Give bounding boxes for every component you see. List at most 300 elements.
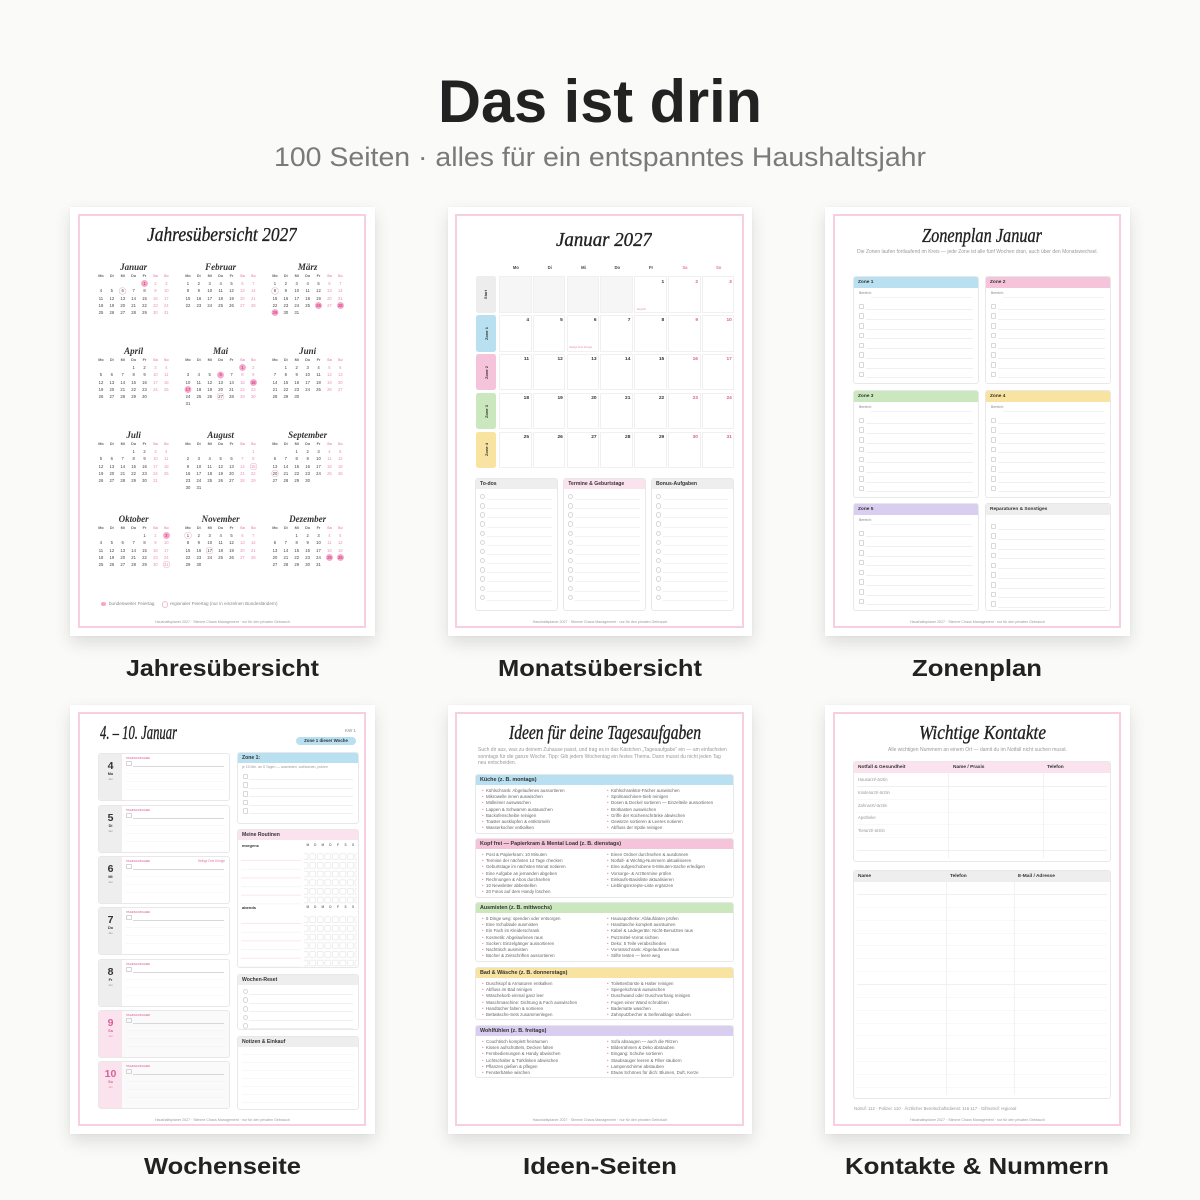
calendar: Juli: Mo: [98, 442, 104, 446]
panel: Zone 1 tasks: Zone 1:: [242, 755, 260, 761]
calendar: Mai: 23: [251, 387, 256, 392]
calendar: August: 17: [196, 471, 201, 476]
calendar: November: 16: [196, 548, 201, 553]
idea card: Bad & Wäsche: Bad & Wäsche (z. B. donnerstags): [480, 970, 567, 976]
month grid: 26: [557, 435, 563, 440]
list: Wohlfühlen right: Lampenschirme abstauben: [611, 1064, 664, 1069]
calendar: September: 11: [327, 456, 332, 461]
caption: Ideen-Seiten: Ideen-Seiten: [523, 1153, 677, 1179]
list: Wohlfühlen right: Sofa absaugen — auch die Ritzen: [611, 1039, 678, 1044]
list: Wohlfühlen left: [482, 1039, 560, 1075]
calendar: März: Mo: [272, 274, 278, 278]
calendar: März: 27: [327, 303, 332, 308]
calendar: Dezember: 9: [306, 540, 309, 545]
calendar: Mai: 14: [229, 380, 234, 385]
weekday headers: Mi: [581, 265, 586, 270]
calendar: Oktober: 10: [164, 540, 169, 545]
calendar: November: Do: [218, 526, 223, 530]
calendar: Juni: 15: [284, 380, 288, 385]
calendar: Mai: 16: [251, 380, 256, 385]
calendar: Dezember: 13: [273, 548, 277, 553]
idea card: Kopf frei: Kopf frei — Papierkram & Mental Load (z. B. dienstags): [480, 841, 621, 847]
panel: Wochen-Reset: [237, 974, 359, 1030]
calendar: September: 18: [327, 464, 332, 469]
calendar: März: 14: [338, 288, 343, 293]
weekday letters: morgens: D: [329, 843, 332, 847]
panel: Monatsübersicht page: [448, 207, 752, 636]
calendar: Mai: 29: [240, 394, 245, 399]
calendar: Juli: 27: [110, 478, 114, 483]
calendar: Dezember: 6: [274, 540, 276, 545]
calendar: März: 16: [284, 296, 288, 301]
list: Küche right: Dosen & Deckel sortieren — Einzelteile aussortieren: [611, 800, 713, 805]
calendar: Februar: 18: [218, 296, 223, 301]
calendar: Juli: 8: [132, 456, 135, 461]
calendar: September: 25: [327, 471, 332, 476]
calendar: Oktober: 16: [153, 548, 158, 553]
calendar: Juni: 19: [327, 380, 332, 385]
calendar: November: 1: [187, 533, 189, 538]
idea card: Kopf frei: [475, 838, 734, 898]
calendar: September: Mo: [272, 442, 278, 446]
table: Kontakte: Name: [858, 874, 871, 879]
table: Notfall & Gesundheit: Tierarzt/-ärztin: [858, 828, 885, 833]
calendar: August: 24: [196, 478, 201, 483]
calendar: September: 15: [294, 464, 299, 469]
subtitle: 100 Seiten · alles für ein entspanntes Haushaltsjahr: [274, 142, 926, 172]
list: Bonus-Aufgaben: Bonus-Aufgaben: [656, 481, 697, 487]
calendar: Juni: 1: [285, 365, 287, 370]
calendar: September: 23: [305, 471, 310, 476]
zone card: Zone 5: Bereich:: [859, 518, 872, 522]
day card: Freitag: Fr: [109, 978, 112, 982]
calendar: September: 1: [296, 449, 298, 454]
calendar: Dezember: 14: [284, 548, 288, 553]
calendar: Dezember: 22: [294, 555, 299, 560]
calendar: Juni: Juni: [299, 346, 316, 356]
calendar: Oktober: 15: [142, 548, 147, 553]
day card: Freitag: [98, 959, 230, 1007]
calendar: Februar: 4: [219, 281, 222, 286]
calendar: Januar: Januar: [120, 262, 147, 272]
day card: Sonntag: So: [108, 1080, 113, 1084]
calendar: Juli: 10: [153, 456, 158, 461]
calendar: Februar: 26: [229, 303, 234, 308]
calendar: November: Fr: [230, 526, 233, 530]
calendar: Juni: 3: [306, 365, 309, 370]
caption: Jahresübersicht: Jahresübersicht: [126, 655, 319, 681]
calendar: Oktober: 23: [153, 555, 158, 560]
calendar: Dezember: Do: [305, 526, 310, 530]
calendar: Juni: 16: [294, 380, 299, 385]
calendar: Februar: 1: [187, 281, 189, 286]
calendar: Mai: 11: [197, 380, 201, 385]
calendar: Juli: Di: [110, 442, 114, 446]
footer: Haushaltsplaner 2027 · Stimme Chaos Management · nur für den privaten Gebrauch: [910, 1118, 1045, 1122]
calendar: November: 20: [240, 548, 245, 553]
list: Bad right: Fugen einer Wand schrubben: [611, 1000, 669, 1004]
calendar: April: So: [164, 358, 169, 362]
calendar: November: 11: [218, 540, 223, 545]
calendar: August: Fr: [230, 442, 233, 446]
zone card: Zone 2: Bereich:: [991, 291, 1004, 295]
calendar: März: So: [338, 274, 343, 278]
calendar: März: 8: [274, 288, 276, 293]
calendar: Mai: 13: [218, 380, 223, 385]
list: Bad right: Zahnputzbecher & Seifenablage säubern: [611, 1012, 691, 1017]
calendar: März: 12: [316, 288, 321, 293]
table: Kontakte: E-Mail / Adresse: [1018, 874, 1055, 879]
calendar: April: [98, 346, 169, 399]
calendar: September: 20: [273, 471, 277, 476]
calendar: Mai: Sa: [240, 358, 245, 362]
calendar: August: Mi: [208, 442, 212, 446]
caption: Wochenseite: Wochenseite: [144, 1153, 301, 1179]
calendar: März: 20: [327, 296, 332, 301]
legend: regionaler Feiertag (nur in einzelnen Bundesländern): [170, 601, 278, 606]
day card: Donnerstag: [98, 907, 230, 955]
calendar: Mai: 21: [229, 387, 234, 392]
calendar: Februar: 15: [186, 296, 190, 301]
calendar: Mai: 10: [186, 380, 190, 385]
calendar: Juni: So: [338, 358, 343, 362]
list: Küche left: Kühlschrank: Abgelaufenes aussortieren: [486, 788, 565, 793]
calendar: August: 1: [252, 449, 254, 454]
calendar: April: 5: [100, 372, 102, 377]
calendar: Juni: 9: [296, 372, 298, 377]
calendar: Mai: 31: [186, 401, 190, 406]
calendar: Mai: Fr: [230, 358, 233, 362]
weekday letters: abends: M: [322, 905, 324, 909]
month grid: 19: [557, 396, 563, 401]
weekday letters: morgens: M: [322, 843, 324, 847]
list: Bad right: Duschwand oder Duschvorhang reinigen: [611, 993, 690, 998]
footer: Haushaltsplaner 2027 · Stimme Chaos Management · nur für den privaten Gebrauch: [155, 1118, 290, 1122]
list: Kopf frei right: [607, 852, 705, 888]
calendar: Juli: 28: [120, 478, 125, 483]
calendar: Juli: 7: [122, 456, 124, 461]
calendar: Mai: Mai: [213, 346, 228, 356]
calendar: Juni: 11: [316, 372, 321, 377]
day card: Samstag: Sa: [108, 1029, 113, 1033]
calendar: Oktober: 12: [110, 548, 114, 553]
calendar: Dezember: 3: [317, 533, 320, 538]
day card: Mittwoch: 6: [108, 863, 113, 875]
calendar: Oktober: 2: [154, 533, 157, 538]
calendar: November: 25: [218, 555, 223, 560]
calendar: November: 8: [187, 540, 189, 545]
calendar: November: 13: [240, 540, 245, 545]
list: Ausmisten left: Kosmetik: Abgelaufenes raus: [486, 934, 543, 940]
calendar: Mai: 27: [218, 394, 223, 399]
list: Bad left: Duschkopf & Armaturen entkalken: [486, 981, 552, 986]
calendar: Juli: 11: [164, 456, 168, 461]
zone card: Zone 3: [853, 390, 979, 498]
list: Küche left: Mikrowelle innen auswischen: [486, 794, 543, 799]
calendar: Oktober: [98, 514, 170, 568]
calendar: September: September: [288, 430, 327, 440]
calendar: April: 12: [99, 380, 103, 385]
calendar: Oktober: Mo: [98, 526, 104, 530]
footer: Haushaltsplaner 2027 · Stimme Chaos Management · nur für den privaten Gebrauch: [910, 620, 1045, 624]
intro paragraph: sonntags für die ganze Woche. Tipp: Gib jedem Wochentag ein festes Thema. Dann musst du nicht jeden Tag: [478, 754, 721, 760]
zone card: Zone 5: Zone 5: [858, 507, 873, 512]
calendar: Januar: 29: [142, 310, 147, 315]
list: Wohlfühlen left: Lichtschalter & Türklinken abwischen: [486, 1058, 558, 1062]
weekday letters: morgens: S: [352, 843, 354, 847]
zone chip: Start: Start: [484, 290, 488, 299]
calendar: März: 15: [273, 296, 277, 301]
calendar: Februar: Mo: [185, 274, 191, 278]
list: Kopf frei left: Geburtstage im nächsten Monat notieren: [486, 864, 566, 869]
month grid: 14: [625, 357, 630, 362]
day card: Mittwoch: TAGESAUFGABE: [126, 859, 150, 863]
calendar: April: Sa: [153, 358, 158, 362]
calendar: Dezember: Mi: [295, 526, 299, 530]
calendar: Mai: [184, 346, 257, 406]
calendar: Januar: Do: [131, 274, 136, 278]
month grid: 24: [726, 396, 732, 401]
calendar: April: 2: [143, 365, 146, 370]
calendar: April: 30: [142, 394, 147, 399]
calendar: Mai: 9: [252, 372, 254, 377]
calendar: Dezember: 15: [294, 548, 299, 553]
list: Küche right: Abfluss der Spüle reinigen: [611, 825, 662, 830]
calendar: August: 29: [251, 478, 256, 483]
calendar: Juli: 6: [111, 456, 113, 461]
calendar: Mai: 1: [241, 365, 244, 370]
calendar: Mai: 28: [229, 394, 234, 399]
calendar: Juni: 20: [338, 380, 343, 385]
calendar: Juli: 4: [165, 449, 167, 454]
calendar: August: Mo: [185, 442, 191, 446]
list: Küche right: Griffe der Küchenschränke abwischen: [611, 813, 685, 818]
calendar: August: 5: [219, 456, 222, 461]
day card: Donnerstag: Jan: [108, 930, 113, 934]
weekday letters: abends: M: [306, 905, 309, 909]
calendar: September: 3: [317, 449, 320, 454]
list: Bad right: Spiegelschrank auswischen: [611, 987, 665, 992]
month grid: Heilige Drei Könige: [569, 346, 592, 349]
day card: Donnerstag: TAGESAUFGABE: [126, 910, 150, 914]
calendar: Dezember: 5: [339, 533, 341, 538]
calendar: April: 1: [132, 365, 135, 370]
calendar: Oktober: 21: [131, 555, 136, 560]
weekday letters: abends: S: [352, 905, 354, 909]
calendar: April: 8: [132, 372, 135, 377]
calendar: Dezember: Dezember: [289, 514, 326, 524]
idea card: Küche: Küche (z. B. montags): [480, 777, 537, 783]
calendar: Dezember: 10: [316, 540, 321, 545]
calendar: Juni: 8: [285, 372, 287, 377]
calendar: Januar: So: [164, 274, 169, 278]
calendar: März: 25: [305, 303, 310, 308]
calendar: Juni: 22: [284, 387, 288, 392]
calendar: September: 28: [284, 478, 288, 483]
calendar: Mai: Do: [218, 358, 223, 362]
zone chip: Zone 2: [476, 354, 496, 390]
calendar: Dezember: 24: [316, 555, 321, 560]
calendar: Februar: 8: [187, 288, 189, 293]
calendar: Oktober: 1: [143, 533, 146, 538]
zone card: Zone 2: [985, 276, 1111, 384]
calendar: Januar: 31: [164, 310, 169, 315]
calendar: Oktober: 22: [142, 555, 147, 560]
calendar: August: So: [251, 442, 256, 446]
calendar: Dezember: [272, 514, 344, 567]
calendar: Juni: 17: [305, 380, 310, 385]
day card: Samstag: TAGESAUFGABE: [126, 1013, 150, 1017]
calendar: März: 1: [274, 281, 276, 286]
calendar: September: 13: [273, 464, 277, 469]
calendar: Januar: Fr: [143, 274, 146, 278]
calendar: Juli: 31: [153, 478, 158, 483]
calendar: März: 30: [284, 310, 288, 315]
list: Küche left: Wasserkocher entkalken: [486, 825, 534, 830]
calendar: März: 13: [327, 288, 332, 293]
list: Ausmisten right: Handtasche komplett ausräumen: [611, 922, 675, 927]
calendar: Januar: 9: [154, 288, 157, 293]
calendar: September: Do: [305, 442, 310, 446]
calendar: Juni: 23: [294, 387, 299, 392]
weekday headers: Mo: [513, 265, 519, 270]
list: Ausmisten left: Socken: Einzelgänger aussortieren: [486, 941, 554, 946]
calendar: August: Di: [197, 442, 201, 446]
list: Bad left: Bettwäsche-Sets zusammenlegen: [486, 1012, 552, 1017]
calendar: April: 27: [110, 394, 114, 399]
calendar: Oktober: 24: [164, 555, 169, 560]
calendar: November: 26: [229, 555, 234, 560]
calendar: Juli: 1: [132, 449, 135, 454]
calendar: November: So: [251, 526, 256, 530]
calendar: April: 23: [142, 387, 147, 392]
calendar: September: 7: [285, 456, 287, 461]
zone chip: Start: [476, 276, 496, 313]
calendar: November: 6: [241, 533, 244, 538]
zone chip: Zone 3: [476, 393, 496, 429]
calendar: September: Fr: [317, 442, 320, 446]
list: Bad left: Abfluss im Bad reinigen: [486, 987, 532, 992]
calendar: Juni: 5: [328, 365, 331, 370]
list: Küche right: Kühlschranktür-Fächer auswischen: [611, 788, 680, 793]
calendar: November: 17: [207, 548, 212, 553]
calendar: Januar: 7: [132, 288, 135, 293]
list: Wohlfühlen right: Etwas Schönes für dich: Blumen, Duft, Kerze: [611, 1070, 699, 1075]
calendar: November: Mi: [208, 526, 212, 530]
table: Kontakte: Telefon: [950, 874, 967, 879]
calendar: August: 3: [198, 456, 200, 461]
calendar: März: 5: [317, 281, 320, 286]
calendar: Mai: 30: [251, 394, 256, 399]
calendar: Januar: 13: [120, 296, 125, 301]
calendar: August: 28: [240, 478, 245, 483]
calendar: Februar: 13: [240, 288, 245, 293]
day card: Sonntag: TAGESAUFGABE: [126, 1064, 150, 1068]
calendar: Mai: 20: [218, 387, 223, 392]
calendar: Januar: 30: [153, 310, 158, 315]
calendar: Dezember: 21: [284, 555, 288, 560]
calendar: Oktober: 11: [99, 548, 103, 553]
calendar: November: 4: [219, 533, 222, 538]
day card: Dienstag: [98, 805, 230, 853]
calendar: Februar: Do: [218, 274, 223, 278]
calendar: Dezember: 27: [273, 562, 277, 567]
calendar: Januar: 23: [153, 303, 158, 308]
calendar: Mai: 18: [196, 387, 201, 392]
calendar: Oktober: 5: [111, 540, 113, 545]
calendar: Juli: Juli: [126, 430, 141, 440]
calendar: November: 18: [218, 548, 223, 553]
calendar: Oktober: 18: [99, 555, 103, 560]
calendar: März: 21: [338, 296, 343, 301]
calendar: Dezember: Mo: [272, 526, 278, 530]
intro paragraph: Such dir aus, was zu deinem Zuhause passt, und trag es in das Kästchen „Tagesaufgabe“ ein — am einfachsten: [478, 747, 727, 753]
list: Kopf frei left: [482, 852, 566, 894]
calendar: Februar: So: [251, 274, 256, 278]
calendar: Mai: Di: [197, 358, 201, 362]
panel: Wochenseite page: [70, 705, 375, 1134]
calendar: November: [184, 514, 256, 567]
calendar: April: 22: [131, 387, 136, 392]
calendar: Mai: 6: [219, 372, 222, 377]
calendar: März: 24: [294, 303, 299, 308]
calendar: Mai: 12: [207, 380, 212, 385]
calendar: April: 9: [143, 372, 146, 377]
footer: Haushaltsplaner 2027 · Stimme Chaos Management · nur für den privaten Gebrauch: [533, 1118, 667, 1122]
calendar: Mai: 22: [240, 387, 245, 392]
day card: Mittwoch: [98, 856, 230, 904]
calendar: Oktober: 25: [99, 562, 103, 567]
calendar: Januar: 16: [153, 296, 158, 301]
calendar: April: Mo: [98, 358, 104, 362]
calendar: Januar: 25: [99, 310, 103, 315]
list: Kopf frei right: Eine aufgeschobene 5-Minuten-Sache erledigen: [611, 864, 705, 869]
idea card: Küche: [475, 774, 734, 834]
calendar: November: Di: [197, 526, 201, 530]
day card: Dienstag: TAGESAUFGABE: [126, 808, 150, 812]
list: To-dos: [475, 478, 558, 611]
calendar: März: 26: [316, 303, 321, 308]
calendar: Juni: 27: [338, 387, 343, 392]
calendar: Juni: Sa: [327, 358, 332, 362]
calendar: Januar: 5: [111, 288, 113, 293]
calendar: Dezember: So: [338, 526, 343, 530]
list: Wohlfühlen right: Staubsauger leeren & Filter säubern: [611, 1058, 682, 1062]
calendar: Mai: 3: [187, 372, 189, 377]
calendar: Oktober: 3: [165, 533, 167, 538]
calendar: November: 10: [207, 540, 212, 545]
calendar: Oktober: 9: [154, 540, 157, 545]
calendar: Mai: 26: [207, 394, 212, 399]
calendar: Oktober: So: [164, 526, 169, 530]
calendar: März: Fr: [317, 274, 320, 278]
calendar: Februar: Fr: [230, 274, 233, 278]
calendar: Juni: 18: [316, 380, 321, 385]
calendar: Oktober: Di: [110, 526, 114, 530]
calendar: Mai: Mi: [208, 358, 212, 362]
list: Wohlfühlen right: Bilderrahmen & Deko abstauben: [611, 1045, 674, 1050]
month grid: 20: [591, 396, 597, 401]
list: Bad right: Toilettenbürste & Halter reinigen: [611, 981, 673, 986]
calendar: Januar: 22: [142, 303, 147, 308]
list: Wohlfühlen left: Fernbedienungen & Handy abwischen: [486, 1051, 560, 1056]
idea card: Bad & Wäsche: [475, 967, 734, 1020]
list: Ausmisten left: Ein Fach im Kleiderschrank: [486, 928, 539, 933]
calendar: Juli: 13: [110, 464, 114, 469]
calendar: August: August: [207, 430, 234, 440]
calendar: Juni: 7: [274, 372, 276, 377]
calendar: April: 11: [164, 372, 168, 377]
